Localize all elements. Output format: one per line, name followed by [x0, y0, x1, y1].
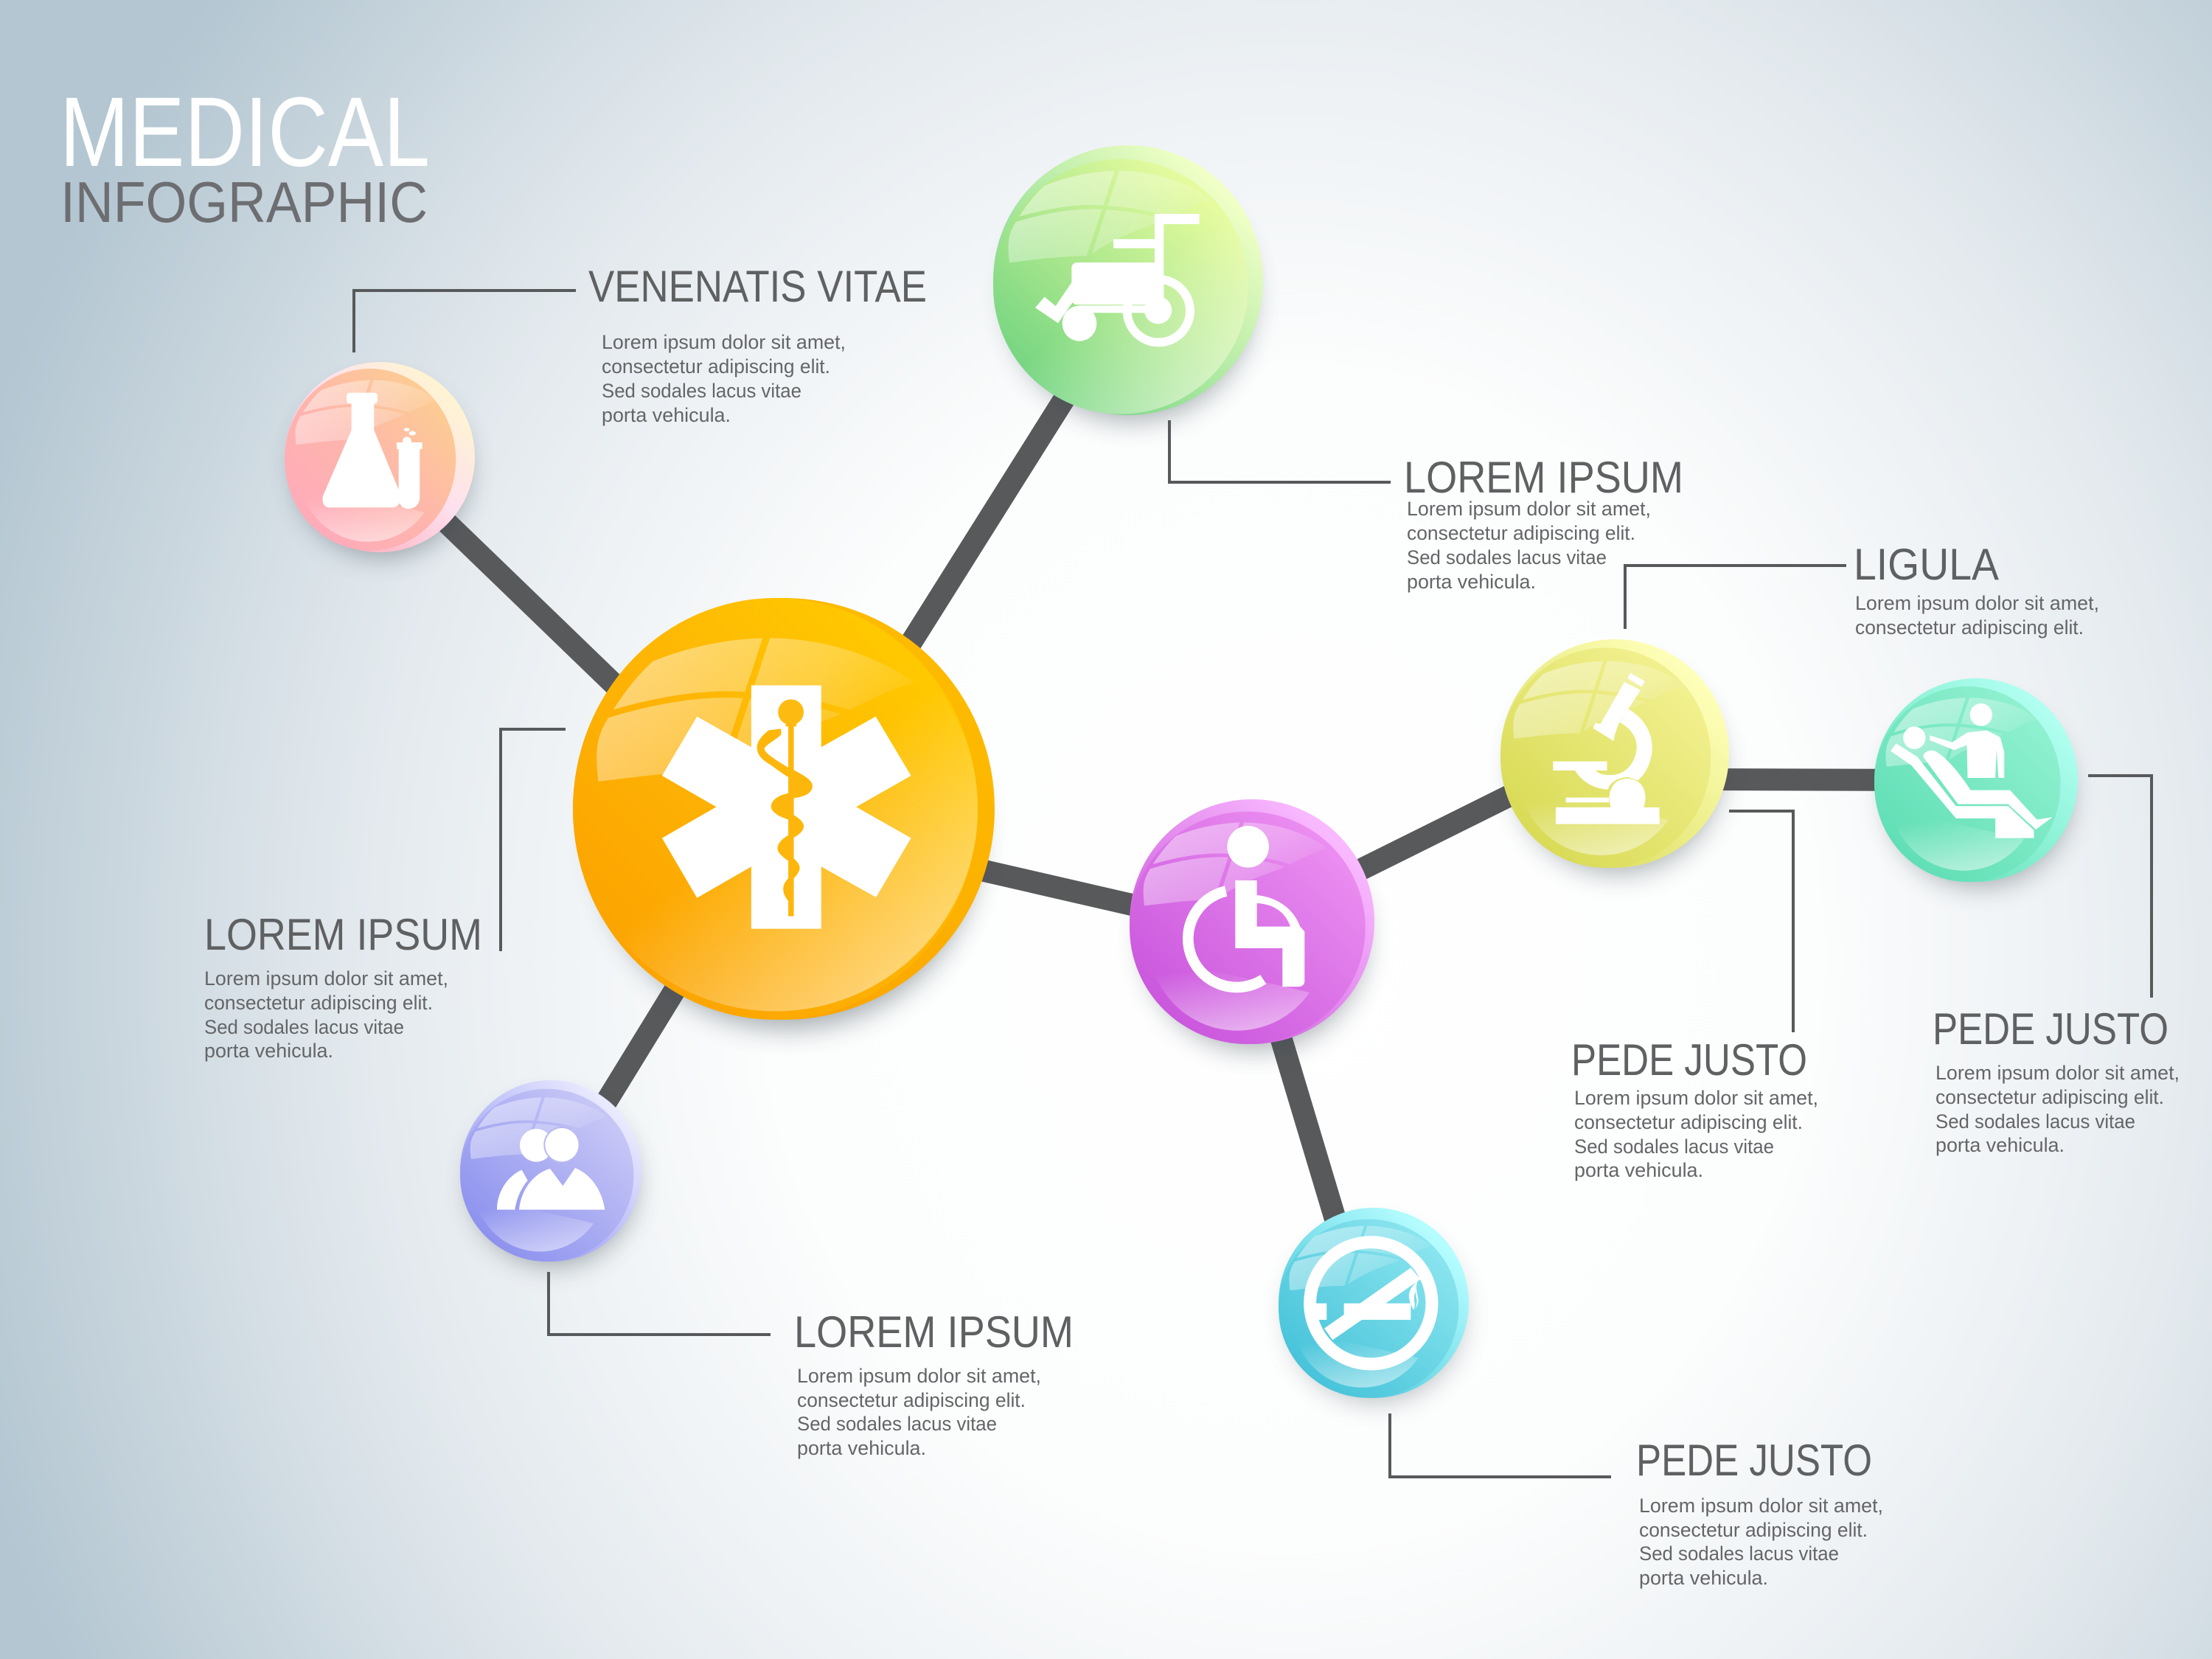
text block: lorem ipsum left [204, 910, 482, 1062]
leader line: lorem ipsum upper [1169, 420, 1391, 482]
title: MEDICAL [60, 77, 430, 187]
ball: pink flask [285, 362, 475, 556]
text block: lorem ipsum lower: Sed sodales lacus vitae [797, 1413, 997, 1435]
text block: pede justo middle [1571, 1035, 1818, 1181]
text block: lorem ipsum upper: Lorem ipsum dolor sit amet, [1407, 498, 1651, 520]
text block: lorem ipsum upper [1404, 453, 1683, 593]
text block: venenatis vitae: consectetur adipiscing elit. [602, 355, 830, 378]
leader line: pede justo middle [1729, 811, 1793, 1032]
icon: no smoking [1310, 1242, 1432, 1364]
text block: pede justo right [1933, 1004, 2180, 1156]
text block: pede justo bottom: Lorem ipsum dolor sit amet, [1639, 1495, 1883, 1517]
text block: lorem ipsum lower: Lorem ipsum dolor sit amet, [797, 1365, 1041, 1387]
text block: lorem ipsum left: porta vehicula. [204, 1040, 333, 1062]
leader line: pede justo right [2088, 776, 2152, 998]
text block: ligula: LIGULA [1854, 540, 1999, 589]
text block: lorem ipsum upper: consectetur adipiscing elit. [1407, 522, 1635, 544]
ball: yellow microscope [1500, 639, 1729, 873]
text block: venenatis vitae: Lorem ipsum dolor sit amet, [602, 331, 846, 353]
icon: flask and test tube [323, 393, 422, 509]
text block: pede justo right: PEDE JUSTO [1933, 1004, 2168, 1054]
text block: lorem ipsum upper: porta vehicula. [1407, 571, 1536, 593]
ball: orange star of life [573, 598, 995, 1029]
text block: pede justo middle: Sed sodales lacus vitae [1574, 1135, 1774, 1158]
icon: wheelchair [1035, 214, 1200, 342]
text block: pede justo bottom: Sed sodales lacus vitae [1639, 1543, 1839, 1565]
ball: purple disabled symbol [1130, 799, 1374, 1050]
icon: two people [497, 1128, 605, 1210]
text block: pede justo right: Sed sodales lacus vitae [1935, 1110, 2135, 1133]
icon: microscope [1553, 673, 1660, 824]
text block: venenatis vitae [588, 262, 927, 426]
icon: patient in dental chair [1891, 703, 2053, 838]
text block: venenatis vitae: Sed sodales lacus vitae [602, 380, 801, 402]
text block: ligula [1854, 540, 2099, 639]
leader line: venenatis vitae [354, 291, 576, 352]
title: INFOGRAPHIC [60, 170, 428, 234]
ball: blue people [460, 1080, 641, 1265]
leader line: lorem ipsum left [501, 729, 566, 951]
ball: teal dental chair [1874, 678, 2078, 886]
text block: pede justo middle: Lorem ipsum dolor sit amet, [1574, 1087, 1818, 1109]
text block: lorem ipsum lower: LOREM IPSUM [794, 1307, 1074, 1357]
text block: venenatis vitae: porta vehicula. [602, 404, 731, 426]
title [60, 77, 430, 234]
leader line: ligula [1625, 566, 1846, 629]
text block: pede justo right: porta vehicula. [1935, 1134, 2065, 1156]
text block: lorem ipsum upper: LOREM IPSUM [1404, 453, 1683, 502]
text block: pede justo bottom [1636, 1436, 1883, 1589]
text block: ligula: consectetur adipiscing elit. [1855, 616, 2084, 639]
leader line: pede justo bottom [1390, 1413, 1611, 1477]
text block: lorem ipsum left: Sed sodales lacus vitae [204, 1016, 404, 1038]
text block: pede justo bottom: consectetur adipiscing elit. [1639, 1519, 1868, 1541]
text block: venenatis vitae: VENENATIS VITAE [588, 262, 927, 311]
ball: cyan no smoking [1279, 1208, 1469, 1401]
leader line: lorem ipsum lower [549, 1272, 771, 1335]
icon: accessibility [1188, 826, 1304, 987]
connector bars network [406, 356, 1917, 1253]
text block: lorem ipsum lower: porta vehicula. [797, 1437, 926, 1459]
text block: lorem ipsum lower: consectetur adipiscing elit. [797, 1389, 1026, 1411]
text block: lorem ipsum upper: Sed sodales lacus vitae [1407, 546, 1607, 568]
text block: pede justo right: consectetur adipiscing elit. [1935, 1086, 2164, 1108]
icon: star of life [662, 685, 911, 929]
text block: ligula: Lorem ipsum dolor sit amet, [1855, 592, 2099, 614]
text block: lorem ipsum left: Lorem ipsum dolor sit amet, [204, 967, 448, 990]
text block: pede justo middle: porta vehicula. [1574, 1159, 1703, 1181]
text block: pede justo middle: PEDE JUSTO [1571, 1035, 1807, 1085]
ball: green wheelchair [993, 145, 1263, 421]
text block: lorem ipsum left: consectetur adipiscing elit. [204, 992, 433, 1014]
text block: lorem ipsum left: LOREM IPSUM [204, 910, 482, 959]
text block: lorem ipsum lower [794, 1307, 1074, 1459]
text block: pede justo middle: consectetur adipiscing elit. [1574, 1111, 1803, 1133]
text block: pede justo bottom: PEDE JUSTO [1636, 1436, 1872, 1485]
text block: pede justo bottom: porta vehicula. [1639, 1567, 1768, 1589]
text block: pede justo right: Lorem ipsum dolor sit amet, [1935, 1062, 2180, 1084]
